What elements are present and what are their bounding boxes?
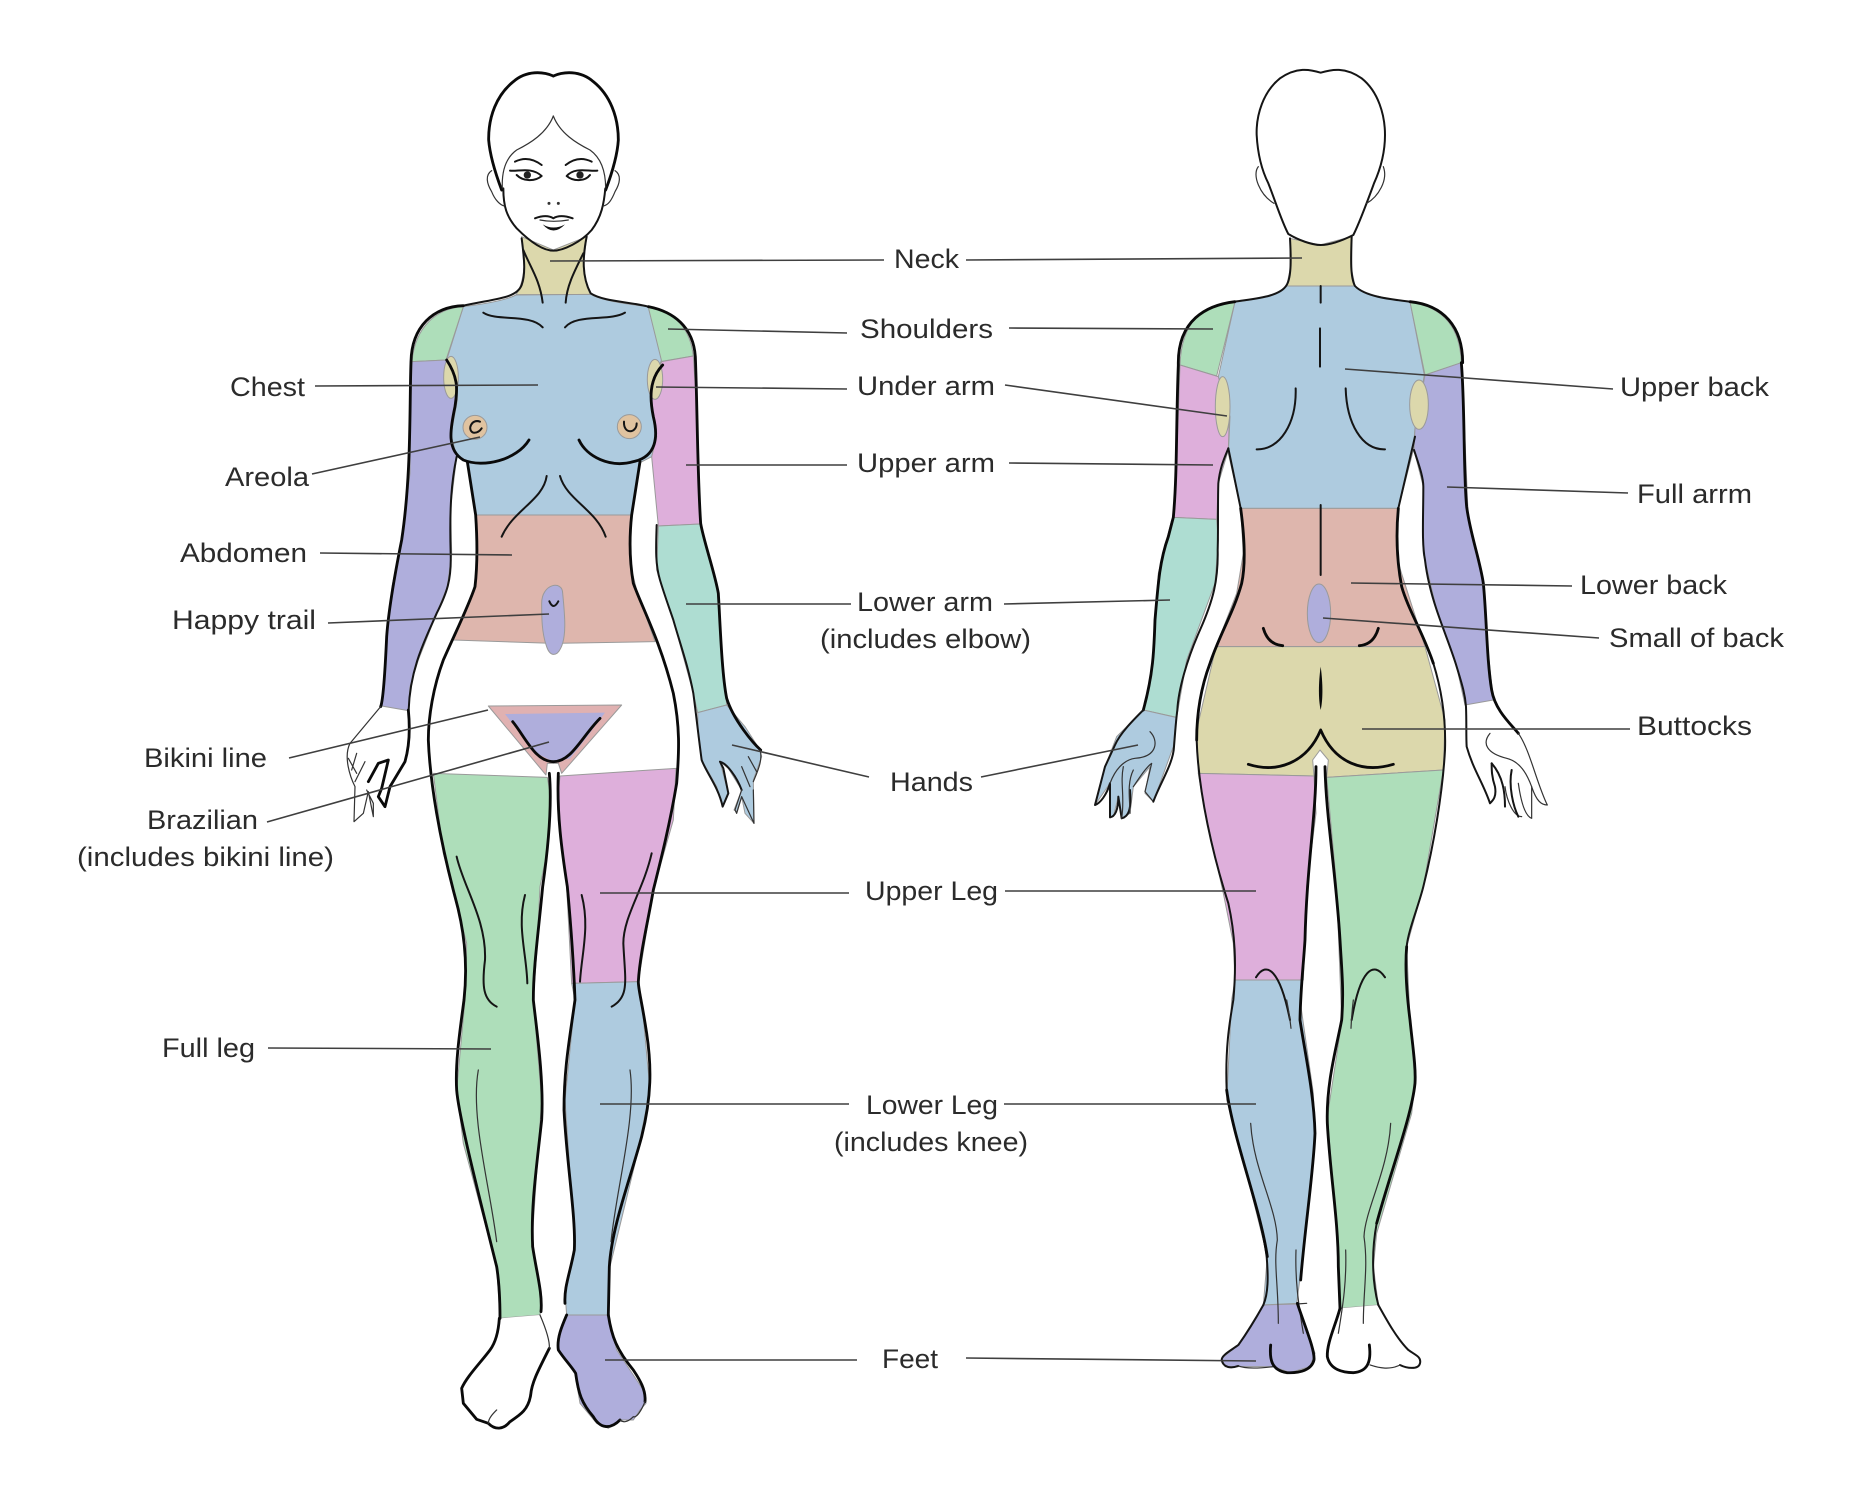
- back region: small of back: [1307, 584, 1331, 643]
- head and hair outline: [487, 73, 619, 251]
- front body outline: [347, 237, 761, 1318]
- front region: upper leg: [558, 768, 676, 983]
- front region: upper arm: [651, 356, 701, 526]
- label: includes bikini line: (includes bikini line): [77, 842, 334, 872]
- front region: happy trail: [542, 585, 565, 654]
- back region: left shoulder: [1180, 302, 1235, 376]
- label: full leg: Full leg: [162, 1033, 255, 1063]
- front region: left shoulder: [412, 307, 463, 362]
- back region: upper back: [1218, 286, 1424, 508]
- label: lower leg: Lower Leg: [866, 1090, 998, 1120]
- label: neck: Neck: [894, 244, 960, 274]
- areolas: [463, 415, 641, 439]
- back region: neck: [1287, 237, 1355, 286]
- back foot outlines: [1222, 1303, 1420, 1373]
- back region: lower arm: [1143, 517, 1218, 717]
- white foot: [1327, 1305, 1420, 1373]
- label: abdomen: Abdomen: [180, 538, 307, 568]
- navel: [549, 601, 558, 606]
- white foot: [463, 1315, 549, 1428]
- label: buttocks: Buttocks: [1637, 711, 1752, 741]
- back region: hand: [1095, 710, 1176, 818]
- label: lower arm: Lower arm: [857, 587, 993, 617]
- back body figure: [1095, 70, 1547, 1373]
- front region: chest: [447, 294, 662, 515]
- label: small of back: Small of back: [1609, 623, 1785, 653]
- front region: brazilian: [505, 713, 605, 762]
- label: under arm: Under arm: [857, 371, 995, 401]
- label: upper back: Upper back: [1620, 372, 1770, 402]
- labels: left column: [77, 372, 334, 1063]
- foot outlines: [462, 1315, 645, 1428]
- back body fold lines: [1248, 286, 1393, 1333]
- label: bikini line: Bikini line: [144, 743, 267, 773]
- front region: bikini line: [488, 705, 622, 775]
- leader lines: [267, 258, 1630, 1361]
- label: shoulders: Shoulders: [860, 314, 993, 344]
- back region: upper leg: [1198, 773, 1316, 980]
- front body fold lines: [447, 250, 663, 1242]
- label: brazilian: Brazilian: [147, 805, 258, 835]
- front region: neck: [516, 237, 591, 295]
- back head outline: [1256, 70, 1385, 245]
- front body figure: [347, 73, 762, 1428]
- front region: left thigh and full leg: [433, 773, 551, 1318]
- under arm patches: [444, 356, 663, 399]
- label: feet: Feet: [882, 1344, 939, 1374]
- front region: full arm: [382, 360, 457, 711]
- face features: [510, 159, 597, 230]
- front region: foot: [558, 1315, 646, 1428]
- front region: lower arm: [657, 524, 727, 713]
- label: includes elbow: (includes elbow): [820, 624, 1031, 654]
- back region: lower back: [1216, 508, 1425, 647]
- label: upper leg: Upper Leg: [865, 876, 998, 906]
- back region: lower leg: [1227, 980, 1315, 1305]
- back region: upper arm: [1173, 365, 1229, 519]
- front region: abdomen: [453, 515, 655, 643]
- labels: centre column: [820, 244, 1031, 1374]
- label: lower back: Lower back: [1580, 570, 1728, 600]
- front region: hand: [698, 705, 762, 823]
- back region: full leg: [1327, 770, 1443, 1308]
- front region: lower leg: [565, 982, 650, 1315]
- front region: right shoulder: [648, 307, 693, 361]
- label: upper arm: Upper arm: [857, 448, 995, 478]
- label: areola: Areola: [225, 462, 310, 492]
- back body outline: [1095, 237, 1547, 1308]
- back region: foot: [1222, 1304, 1315, 1373]
- label: includes knee: (includes knee): [834, 1127, 1028, 1157]
- labels: right column: [1580, 372, 1785, 741]
- under arm patches: [1215, 377, 1428, 437]
- label: happy trail: Happy trail: [172, 605, 316, 635]
- back region: full arm: [1414, 363, 1493, 705]
- back region: buttocks: [1197, 647, 1445, 777]
- label: chest: Chest: [230, 372, 306, 402]
- label: hands: Hands: [890, 767, 973, 797]
- label: full arm: Full arrm: [1637, 479, 1752, 509]
- back region: right shoulder: [1410, 302, 1461, 375]
